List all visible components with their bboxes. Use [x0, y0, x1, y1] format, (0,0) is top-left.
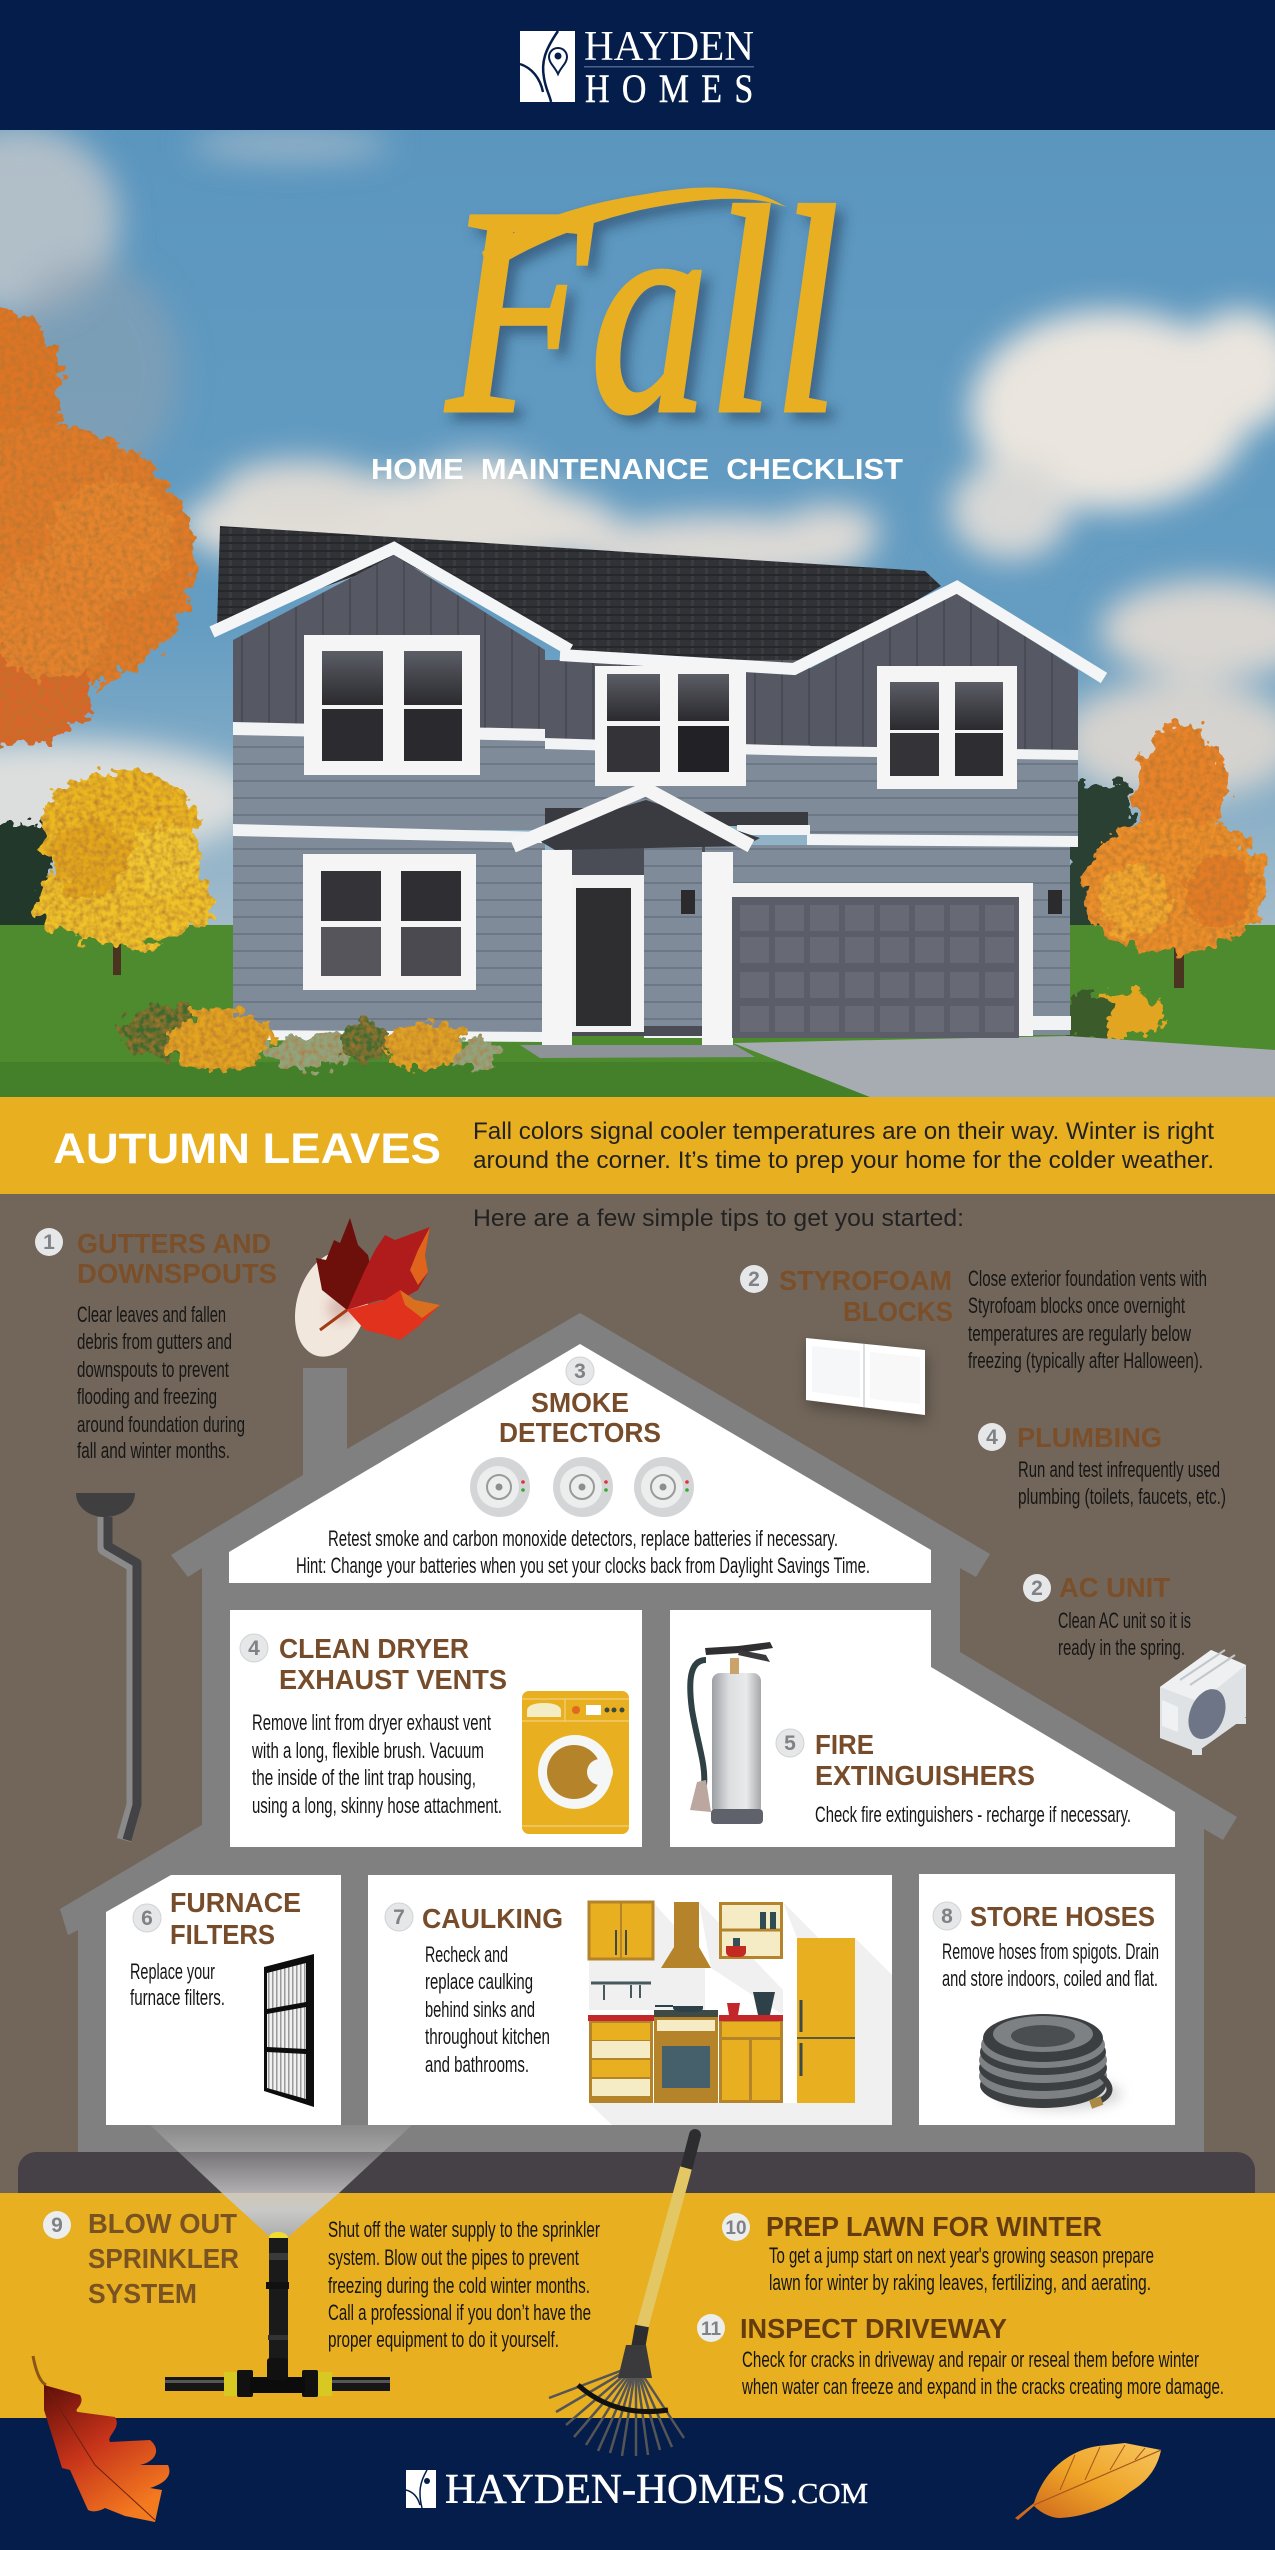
body text: system. Blow out the pipes to prevent: [328, 2245, 579, 2270]
body text: flooding and freezing: [77, 1384, 217, 1409]
badge 2: [1023, 1574, 1051, 1602]
body text: Remove hoses from spigots. Drain: [942, 1939, 1159, 1964]
heading: PLUMBING: [1017, 1422, 1162, 1453]
body text: [1058, 1608, 1191, 1660]
body text: fall and winter months.: [77, 1438, 230, 1463]
subtitle: HOME MAINTENANCE CHECKLIST: [371, 454, 903, 486]
body text: [328, 2217, 600, 2352]
heading: SPRINKLER: [88, 2243, 239, 2274]
body text: [1018, 1457, 1226, 1509]
badge 10: [722, 2213, 750, 2241]
ground floor siding: [233, 835, 545, 1035]
body text: Shut off the water supply to the sprinkler: [328, 2217, 600, 2242]
lawn: [0, 925, 1275, 1100]
white trim bands: [233, 722, 1078, 1042]
body text: Clean AC unit so it is: [1058, 1608, 1191, 1633]
icon: downspout: [76, 1493, 137, 1840]
hero photo: house and autumn landscape: [0, 125, 1275, 1100]
footer logo and web address: [406, 2467, 868, 2513]
heading: [499, 1387, 661, 1448]
body text: with a long, flexible brush. Vacuum: [251, 1738, 484, 1763]
body text: Recheck and: [425, 1942, 508, 1967]
icon: filter: [264, 1954, 314, 2107]
web address: .COM: [790, 2479, 868, 2510]
body text: Call a professional if you don’t have the: [328, 2300, 591, 2325]
heading: INSPECT DRIVEWAY: [740, 2313, 1007, 2344]
header bar: [0, 0, 1275, 131]
badge 2: 2: [1031, 1577, 1043, 1600]
logo: Hayden Homes: HAYDEN: [584, 24, 754, 70]
garage: [681, 883, 1062, 1038]
body text: throughout kitchen: [425, 2024, 550, 2049]
badge 1: 1: [43, 1231, 55, 1254]
body text: [741, 2347, 1224, 2399]
heading: FURNACE: [170, 1887, 301, 1918]
sprinkler spray cone: [150, 2125, 412, 2237]
footer bar: [0, 2418, 1275, 2550]
body text: Retest smoke and carbon monoxide detectors, replace batteries if necessary.: [328, 1526, 838, 1551]
driveway: [733, 1036, 1275, 1097]
band heading: AUTUMN LEAVES: [53, 1125, 441, 1173]
upper siding dark: [233, 555, 545, 735]
badge 7: [385, 1903, 413, 1931]
badge 4: 4: [248, 1637, 260, 1660]
room: store hoses: [919, 1874, 1175, 2125]
badge 8: [933, 1902, 961, 1930]
room: fire extinguishers: [670, 1610, 1175, 1847]
body text: [130, 1959, 225, 2010]
body text: proper equipment to do it yourself.: [328, 2327, 559, 2352]
heading: DETECTORS: [499, 1417, 661, 1448]
heading: [170, 1887, 301, 1950]
right hedge: [1066, 990, 1164, 1040]
tip 2: AC unit: [1023, 1572, 1246, 1755]
yellow tree: [35, 770, 215, 975]
band body text: Fall colors signal cooler temperatures are on their way. Winter is right: [473, 1118, 1214, 1145]
heading: GUTTERS AND: [77, 1228, 271, 1259]
heading: STYROFOAM: [779, 1265, 952, 1296]
tip 10: prep lawn for winter: [722, 2211, 1154, 2295]
right orange tree: [1083, 724, 1267, 988]
icon: fire extinguisher: [690, 1642, 773, 1824]
logo: Hayden Homes: [520, 24, 754, 112]
heading: AC UNIT: [1059, 1572, 1170, 1603]
badge 4: [240, 1634, 268, 1662]
badge 10: 10: [725, 2218, 747, 2239]
icon: oak leaf left: [33, 2356, 169, 2522]
heading: CAULKING: [422, 1903, 563, 1934]
body text: Check fire extinguishers - recharge if necessary.: [815, 1802, 1131, 1827]
long shadows: [589, 1902, 892, 2125]
body text: the inside of the lint trap housing,: [252, 1765, 476, 1790]
body text: around foundation during: [77, 1412, 245, 1437]
tip 9: blow out sprinkler system: [43, 2208, 600, 2397]
sky and clouds: [0, 125, 1275, 960]
badge 4: [978, 1423, 1006, 1451]
badge 3: [566, 1357, 594, 1385]
heading: PREP LAWN FOR WINTER: [766, 2211, 1102, 2242]
body text: [769, 2243, 1154, 2295]
badge 6: 6: [141, 1907, 153, 1930]
icon: styrofoam block: [806, 1338, 925, 1415]
body text: Hint: Change your batteries when you set your clocks back from Daylight Savings Time.: [296, 1553, 870, 1578]
heading: EXHAUST VENTS: [279, 1664, 507, 1695]
body text: downspouts to prevent: [77, 1357, 229, 1382]
heading: CLEAN DRYER: [279, 1633, 469, 1664]
body text: and bathrooms.: [425, 2052, 529, 2077]
badge 9: [43, 2211, 71, 2239]
body text: [425, 1942, 550, 2077]
heading: [779, 1265, 953, 1327]
body text: behind sinks and: [425, 1997, 535, 2022]
icon: sprinkler pipe: [165, 2232, 390, 2397]
gable fascia: [212, 548, 1104, 678]
intro line: Here are a few simple tips to get you started:: [473, 1205, 964, 1232]
heading: [815, 1729, 1035, 1791]
roof: [217, 526, 941, 670]
tip 4: plumbing: [978, 1422, 1226, 1509]
heading: FILTERS: [170, 1919, 275, 1950]
body text: furnace filters.: [130, 1985, 225, 2010]
icon: dryer: [522, 1691, 629, 1834]
badge 5: [776, 1729, 804, 1757]
body text: debris from gutters and: [77, 1329, 232, 1354]
badge 9: 9: [51, 2214, 63, 2237]
body text: [77, 1302, 245, 1463]
heading: SYSTEM: [88, 2278, 197, 2309]
heading: BLOW OUT: [88, 2208, 237, 2239]
body text: Replace your: [130, 1959, 215, 1984]
house cross-section: [60, 1313, 1237, 2155]
icon: maple leaf: [283, 1218, 440, 1366]
body text: ready in the spring.: [1058, 1635, 1185, 1660]
heading: EXTINGUISHERS: [815, 1760, 1035, 1791]
icon: golden leaf right: [1015, 2443, 1161, 2520]
badge 2: [740, 1265, 768, 1293]
body text: freezing during the cold winter months.: [328, 2273, 590, 2298]
heading: BLOCKS: [843, 1296, 953, 1327]
body text: [251, 1710, 502, 1818]
body text: Remove lint from dryer exhaust vent: [252, 1710, 491, 1735]
icon: AC unit: [1160, 1650, 1246, 1755]
badge 8: 8: [941, 1905, 953, 1928]
band body text: [473, 1118, 1214, 1174]
band body text: around the corner. It’s time to prep your home for the colder weather.: [473, 1147, 1214, 1174]
icon: kitchen: [588, 1902, 892, 2125]
autumn leaves intro band: [0, 1097, 1275, 1194]
web address: HAYDEN-HOMES: [445, 2467, 786, 2513]
heading: DOWNSPOUTS: [77, 1258, 277, 1289]
body text: Clear leaves and fallen: [77, 1302, 226, 1327]
heading: [279, 1633, 507, 1695]
badge 3: 3: [574, 1360, 586, 1383]
badge 1: [35, 1228, 63, 1256]
room: smoke detectors: [229, 1344, 931, 1583]
room: furnace filters: [106, 1875, 341, 2125]
body text: [296, 1526, 870, 1578]
windows: [303, 635, 1017, 990]
tip 1: gutters and downspouts: [35, 1218, 440, 1840]
house illustration: [212, 526, 1275, 1097]
body text: [968, 1266, 1207, 1373]
icon: coiled hose: [979, 2014, 1122, 2110]
badge 6: [133, 1904, 161, 1932]
tip 11: inspect driveway: [697, 2313, 1224, 2399]
ground slab: [18, 2152, 1255, 2212]
icon: smoke detectors: [470, 1457, 694, 1517]
body text: replace caulking: [425, 1969, 533, 1994]
background tree line: [0, 785, 1130, 935]
middle siding: [233, 730, 545, 830]
body text: [942, 1939, 1159, 1991]
badge 11: [697, 2314, 725, 2342]
large orange maple tree: [0, 310, 195, 745]
room: clean dryer exhaust vents: [230, 1610, 642, 1847]
porch: [513, 789, 760, 1058]
footer logo mark: [406, 2470, 436, 2508]
title script: Fall: Fall: [443, 147, 839, 474]
body text: and store indoors, coiled and flat.: [942, 1966, 1158, 1991]
foundation shrubs: [120, 1004, 497, 1070]
room: caulking: [368, 1875, 892, 2125]
badge 4: 4: [986, 1426, 998, 1449]
tip 2: styrofoam blocks: [740, 1265, 1207, 1415]
badge 7: 7: [393, 1906, 405, 1929]
logo: Hayden Homes: HOMES: [585, 68, 753, 112]
heading: STORE HOSES: [970, 1901, 1155, 1932]
heading: SMOKE: [531, 1387, 629, 1418]
yellow lawn section: [0, 2193, 1275, 2418]
heading: [88, 2208, 239, 2309]
badge 11: 11: [701, 2319, 721, 2340]
icon: rake: [549, 2135, 695, 2456]
heading: [77, 1228, 277, 1289]
heading: FIRE: [815, 1729, 874, 1760]
badge 5: 5: [784, 1732, 796, 1755]
body text: using a long, skinny hose attachment.: [252, 1793, 502, 1818]
lower porch roof: [545, 808, 808, 826]
badge 2: 2: [748, 1268, 760, 1291]
